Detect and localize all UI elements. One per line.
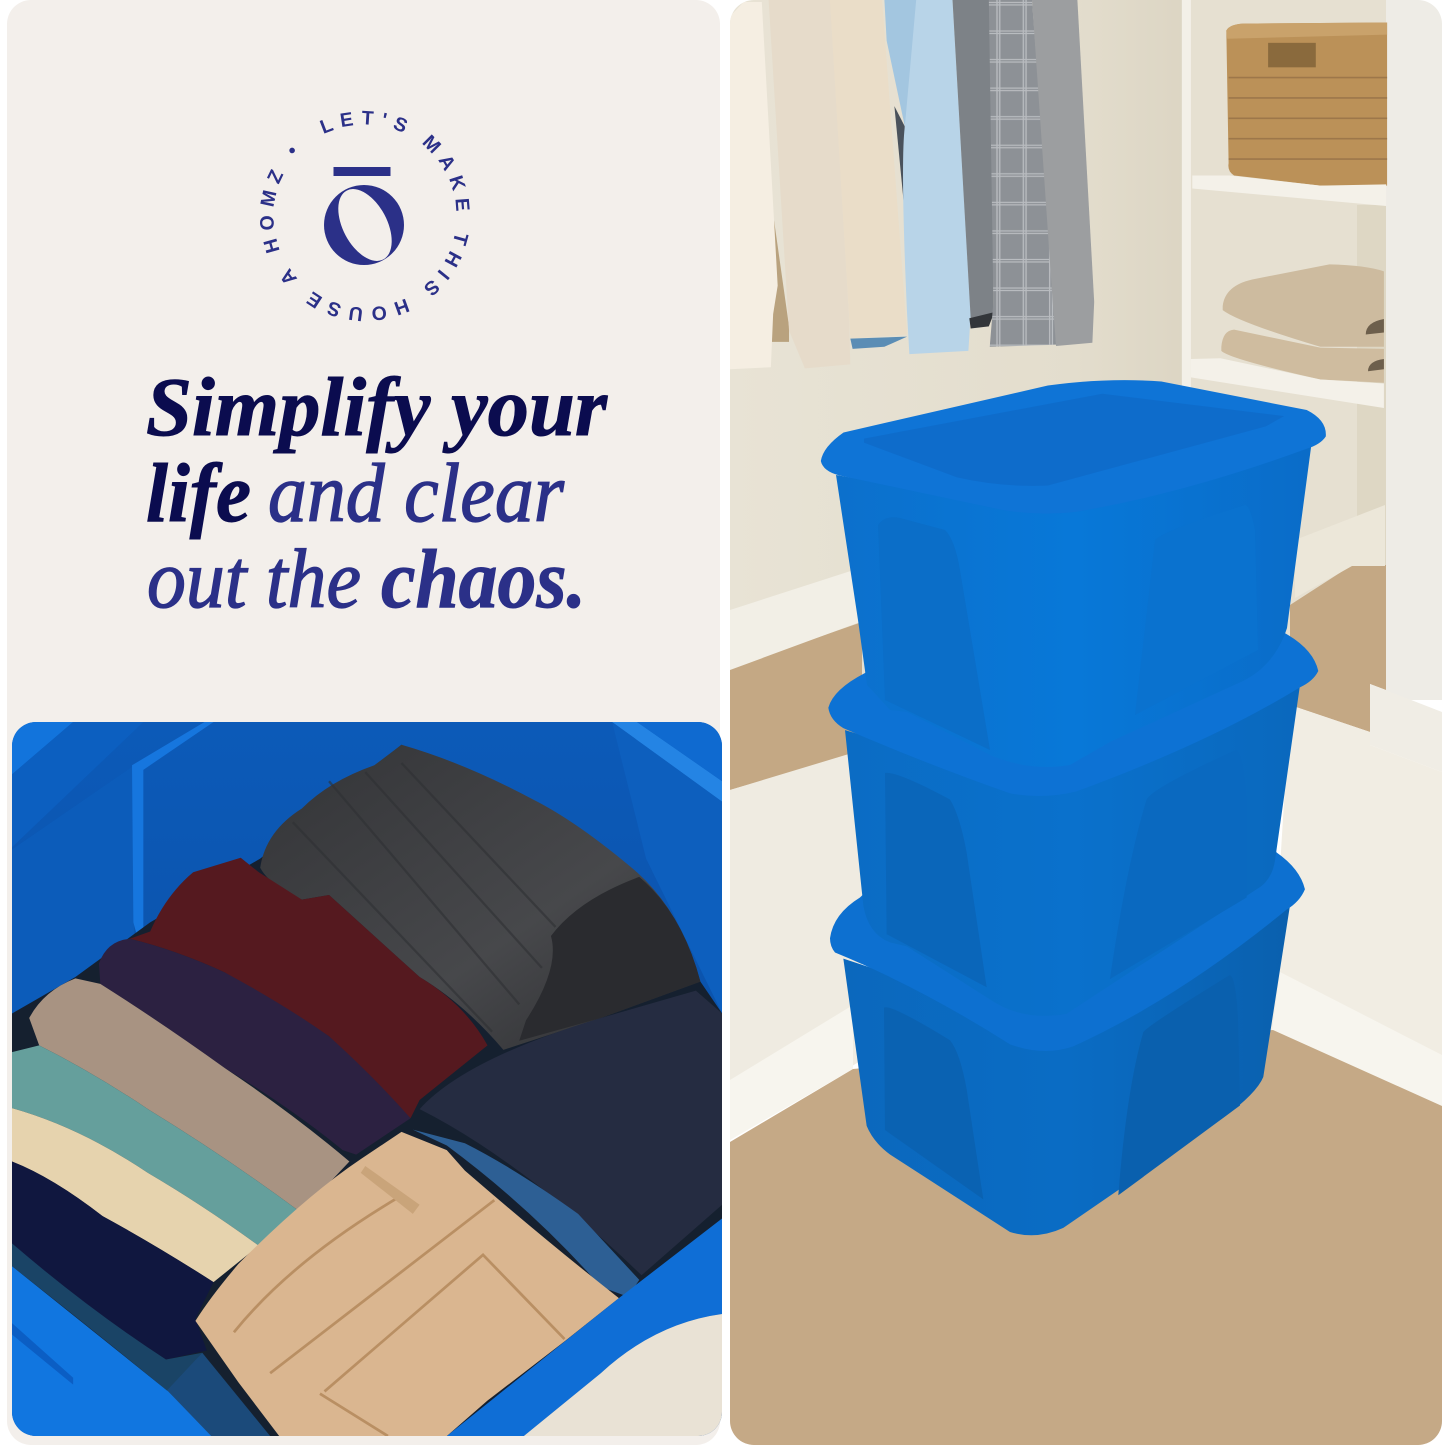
lid inset bbox=[864, 394, 1284, 486]
garment: navy bbox=[12, 1161, 214, 1360]
upper shelf board bbox=[1192, 175, 1386, 206]
lower right baseboard bbox=[1272, 972, 1442, 1108]
garment: light blue shirt bbox=[903, 0, 971, 354]
garment: beige jacket bbox=[769, 0, 850, 368]
panel: photo of folded clothes in blue bin bbox=[12, 722, 722, 1436]
left baseboard bbox=[730, 568, 860, 670]
lower wall left bbox=[730, 754, 862, 1080]
shelf unit back wall bbox=[1190, 0, 1388, 640]
shelf unit side bbox=[1357, 205, 1387, 575]
lower wall right bbox=[1270, 708, 1442, 1055]
bin recess right bbox=[1118, 975, 1240, 1195]
folded towels bbox=[1221, 264, 1384, 383]
bin interior bbox=[12, 722, 722, 1436]
bin recess right bbox=[1110, 750, 1247, 979]
right white column bbox=[1386, 0, 1442, 700]
rim groove bbox=[12, 1323, 73, 1385]
bin top right ridge bbox=[612, 722, 722, 802]
bin body bbox=[845, 685, 1300, 1016]
bin recess left bbox=[884, 1007, 983, 1199]
bin recess right bbox=[1135, 505, 1258, 715]
bin top left rim bbox=[12, 722, 73, 774]
badge circular text: LET'S MAKE THIS HOUSE A HOMZ • bbox=[260, 110, 470, 322]
bottom bin bbox=[830, 824, 1305, 1235]
garment: plaid shirt bbox=[989, 0, 1056, 347]
upper left carpet bbox=[730, 622, 862, 790]
garment: jeans bbox=[413, 1130, 639, 1297]
lower left baseboard bbox=[730, 1005, 853, 1140]
bin lid bbox=[821, 380, 1326, 514]
panel: left cream background bbox=[7, 0, 720, 1445]
garment: dark purple bbox=[99, 939, 411, 1155]
bin body bbox=[843, 906, 1290, 1235]
bin body bbox=[836, 440, 1312, 767]
bin right wall bbox=[612, 722, 722, 1013]
garment: taupe bbox=[29, 978, 349, 1212]
bin bottom right rim bbox=[447, 1218, 722, 1436]
garment: beige jacket two bbox=[830, 0, 907, 339]
garment: maroon bbox=[130, 858, 488, 1118]
column base bbox=[1370, 684, 1442, 772]
garment: teal-blue lower bbox=[12, 1243, 202, 1391]
carpet floor bbox=[730, 1030, 1442, 1445]
title: Simplify your bbox=[146, 361, 608, 454]
middle bin bbox=[828, 612, 1318, 1016]
garment: cream bbox=[12, 1108, 259, 1282]
panel: closet photo with stacked blue bins bbox=[730, 0, 1442, 1445]
title: chaos. bbox=[381, 533, 586, 626]
title: out the bbox=[147, 533, 361, 626]
garment: white sweater bbox=[730, 2, 778, 369]
wicker basket bbox=[1226, 22, 1387, 186]
bin recess left bbox=[878, 517, 990, 750]
bin lid bbox=[828, 612, 1318, 796]
garment: tan gap behind sweater bbox=[772, 220, 789, 342]
logo: circular badge bbox=[260, 110, 470, 322]
bin recess left bbox=[885, 773, 987, 987]
icon: macron bar bbox=[334, 167, 390, 176]
garment: denim hem bbox=[850, 337, 907, 349]
icon: letter o ring bbox=[324, 180, 404, 270]
floor corner bbox=[524, 1314, 722, 1436]
garment: dark grey shirt bbox=[953, 0, 993, 318]
garment: teal bbox=[12, 1045, 300, 1246]
right upper baseboard bbox=[1338, 505, 1385, 574]
upper right carpet bbox=[1290, 565, 1386, 732]
garment: navy corduroy bbox=[420, 991, 722, 1275]
garment: blue back bbox=[884, 0, 921, 126]
garment: dark shadow between shirts bbox=[894, 106, 909, 261]
garment: charcoal knit bbox=[260, 745, 700, 1050]
clothes shadow base bbox=[12, 745, 722, 1436]
lower shelf board bbox=[1191, 358, 1384, 408]
title: and clear bbox=[268, 447, 564, 540]
shelf unit post bbox=[1182, 0, 1191, 392]
closet wall bbox=[730, 0, 1182, 674]
bin bottom left rim bbox=[12, 1266, 211, 1436]
bin corner ridge bbox=[132, 722, 214, 932]
title: life bbox=[146, 447, 251, 540]
hanging clothes bbox=[730, 0, 1094, 369]
garment: khaki trousers bbox=[195, 1132, 619, 1436]
garment: grey hoodie bbox=[1032, 0, 1094, 346]
garment: dark hem bbox=[969, 312, 994, 328]
bin left wall bbox=[12, 876, 134, 1014]
top bin bbox=[821, 380, 1326, 767]
garment: lower denim bbox=[166, 1353, 270, 1436]
bin lid bbox=[830, 824, 1305, 1051]
